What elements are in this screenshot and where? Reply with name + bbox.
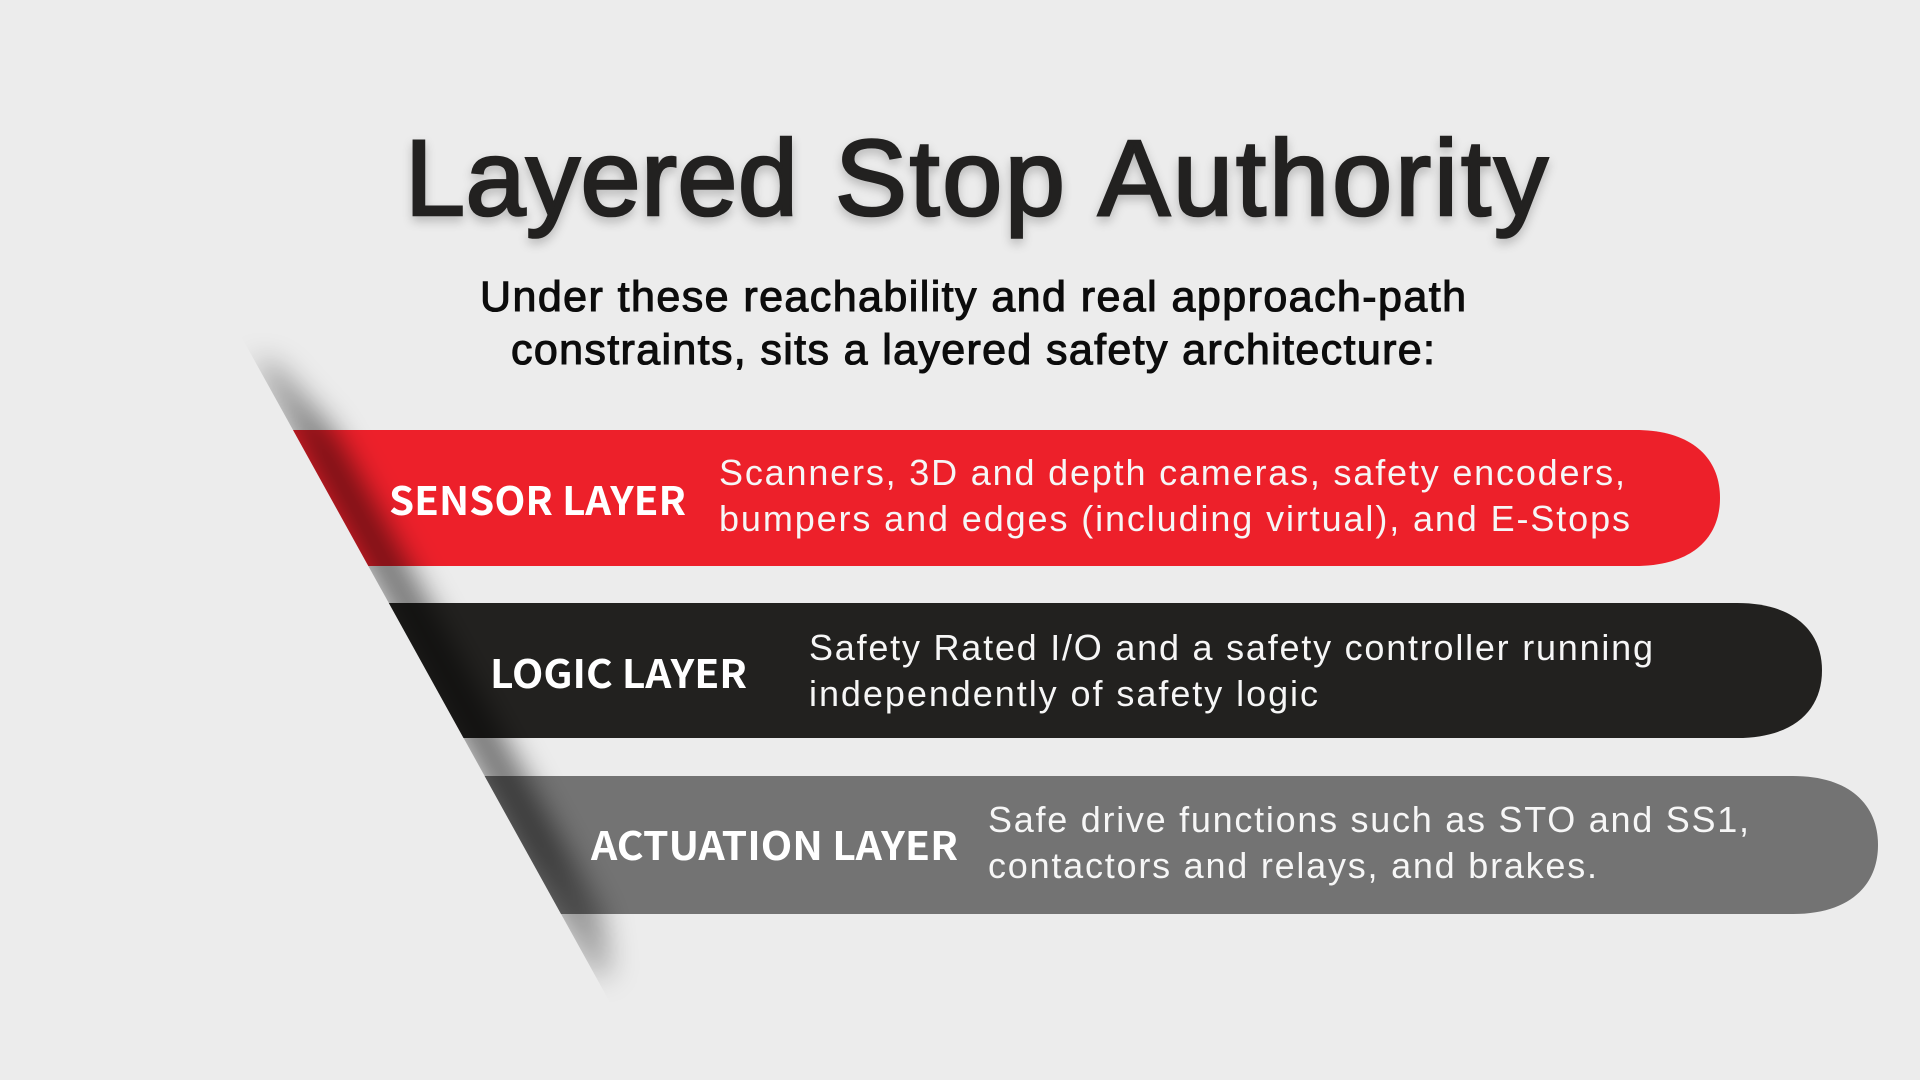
logic layer description [809,627,1653,714]
actuation layer description: contactors and relays, and brakes. [988,845,1597,886]
logic layer label: LOGIC LAYER [490,644,747,700]
actuation layer label: ACTUATION LAYER [590,816,958,872]
subtitle [480,273,1466,374]
sensor layer description: Scanners, 3D and depth cameras, safety encoders, [719,452,1625,493]
logic layer description: independently of safety logic [809,673,1318,714]
subtitle: Under these reachability and real approach-path [480,273,1466,321]
title [405,117,1548,238]
actuation layer description: Safe drive functions such as STO and SS1, [988,799,1749,840]
panel: sensor layer bar [293,430,1720,566]
panel: actuation layer bar [485,776,1878,914]
title: Layered [405,117,798,238]
sensor layer label: SENSOR LAYER [389,471,686,527]
title: Stop [835,117,1065,238]
sensor layer description [719,452,1630,539]
title: Authority [1098,117,1548,238]
sensor layer description: bumpers and edges (including virtual), and E-Stops [719,498,1630,539]
panel: logic layer bar [389,603,1822,738]
subtitle: constraints, sits a layered safety architecture: [511,326,1435,374]
actuation layer description [988,799,1749,886]
diagonal fold shadow [252,358,612,975]
logic layer description: Safety Rated I/O and a safety controller running [809,627,1653,668]
